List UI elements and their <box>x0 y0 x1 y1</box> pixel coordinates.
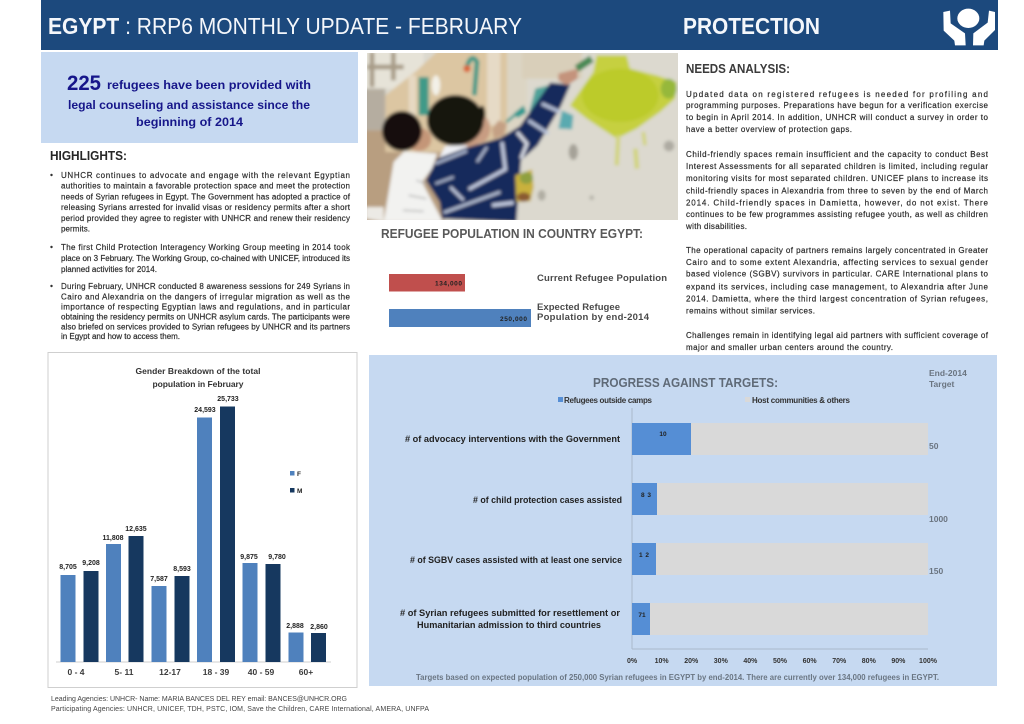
paragraph: verification exercise <box>686 90 989 134</box>
highlights panel <box>50 148 351 341</box>
bar: current refugee population <box>389 274 465 292</box>
row: advocacy interventions <box>405 423 939 455</box>
highlight bullet 3 <box>50 282 351 341</box>
axis labels: 80% <box>862 658 877 665</box>
row: sgbv cases <box>410 543 943 576</box>
highlight bullet 1: UNHCR continues to advocate and engage with the relevant Egyptian <box>61 171 350 180</box>
label: end-2014 target: End-2014 <box>929 368 967 378</box>
bars: age 0-4: 9,208 <box>82 560 100 567</box>
axis labels: 20% <box>684 658 699 665</box>
paragraph: operational capacity: remains without similar services. <box>686 306 815 316</box>
bar: expected refugee population <box>389 309 531 327</box>
row: sgbv cases: # of SGBV cases assisted with at least one service <box>410 555 622 565</box>
axis labels: 70% <box>832 658 847 665</box>
highlight bullet 3: During February, UNHCR conducted 8 awareness sessions for 249 Syrians in <box>61 282 350 291</box>
legend: gender: F <box>297 471 301 478</box>
paragraph: child-friendly spaces: with disabilities. <box>685 222 747 231</box>
highlight bullet 1: releasing Syrians arrested for invalid visas or residency permits after a short <box>61 203 351 212</box>
paragraph: child-friendly spaces: child-friendly spaces in Alexandria from three to seven by the end of March <box>686 186 988 196</box>
highlight bullet 1: period provided they agree to register with UNHCR and renew their residency <box>61 214 350 223</box>
callout: refugees provided with legal counseling: 225 <box>67 72 101 95</box>
row: advocacy interventions: # of advocacy interventions with the Government <box>405 434 620 444</box>
bars: age 60+: 2,888 <box>286 623 304 630</box>
label: current refugee population: Current Refugee Population <box>537 273 667 284</box>
row: sgbv cases: 12 <box>639 552 649 559</box>
row: advocacy interventions: 50 <box>929 441 939 451</box>
paragraph: operational capacity: 2014. Damietta, where the third largest concentration of Syrian refugees, <box>686 294 988 304</box>
heading: progress against targets: PROGRESS AGAINST TARGETS: <box>593 375 778 390</box>
paragraph: child-friendly spaces: Child-friendly spaces remain insufficient and the capacity to conduct Best <box>686 150 989 159</box>
bar: current refugee population: 134,000 <box>435 280 462 288</box>
paragraph: child-friendly spaces: continues to be few programmes assisting refugee youth, as well as children <box>686 210 988 219</box>
bars: age 40-59: 9,875 <box>240 554 258 561</box>
bars: age 12-17 <box>150 566 191 677</box>
highlight bullet 2 <box>50 243 351 274</box>
bars: age 18-39: 18 - 39 <box>203 667 230 677</box>
highlight bullet 2: place on 3 February. The Working Group, co-chained with UNICEF, introduced its <box>61 254 350 263</box>
title: EGYPT : RRP6 MONTHLY UPDATE - FEBRUARY <box>48 13 522 39</box>
highlight bullet 2: planned activities for 2014. <box>61 265 157 274</box>
paragraph: verification exercise: to begin in April 2014. In addition, UNHCR will conduct a survey in order to <box>686 113 989 122</box>
axis labels: 30% <box>714 658 729 665</box>
footer: agencies <box>51 696 429 713</box>
chart panel: gender breakdown <box>48 352 357 688</box>
heading: highlights: HIGHLIGHTS: <box>50 148 127 163</box>
row: resettlement submissions: Humanitarian admission to third countries <box>417 620 601 630</box>
axis labels: 90% <box>891 658 906 665</box>
row: advocacy interventions: 10 <box>659 431 667 438</box>
paragraph: child-friendly spaces: 2014. Child-friendly spaces in Damietta, however, do not exist. There <box>686 198 989 208</box>
label: end-2014 target: Target <box>929 379 955 389</box>
footer: agencies: Participating Agencies: UNHCR, UNICEF, TDH, PSTC, IOM, Save the Children, CARE International, AMERA, UNFPA <box>51 706 429 713</box>
highlight bullet 3: obtaining the residency permits on UNHCR asylum cards. The participants were <box>61 312 351 322</box>
chart title: population in February <box>152 379 244 389</box>
highlight bullet 3: importance of respecting Egyptian laws and regulations, and in particular <box>61 302 350 312</box>
bars: age 5-11: 5- 11 <box>115 667 134 677</box>
bars: age 60+: 60+ <box>299 667 313 677</box>
bars: age 5-11 <box>102 526 147 677</box>
footer: agencies: Leading Agencies: UNHCR- Name: MARIA BANCES DEL REY email: BANCES@UNHCR.ORG <box>51 696 347 703</box>
legend: progress: Host communities & others <box>752 396 851 405</box>
highlight bullet 1: authorities to maintain a favorable protection space and meet the protection <box>61 182 350 190</box>
row: resettlement submissions: 71 <box>638 612 646 619</box>
highlight bullet 3: also briefed on services provided to Syrian refugees by UNHCR and its partners <box>61 322 350 332</box>
label: expected refugee population: Expected Refugee <box>537 302 620 313</box>
bars: age 40-59: 9,780 <box>268 554 286 561</box>
bars: age 18-39: 25,733 <box>217 396 239 403</box>
row: resettlement submissions <box>400 603 928 635</box>
paragraph: operational capacity: based violence (SGBV) survivors in particular. CARE International plans to <box>686 270 989 278</box>
bars: age 60+ <box>286 623 328 677</box>
paragraph: operational capacity: expand its services, including case management, to Alexandria after June <box>686 282 989 292</box>
bar: expected refugee population: 250,000 <box>500 316 527 323</box>
row: child protection cases: # of child protection cases assisted <box>473 495 622 505</box>
label: expected refugee population <box>537 302 650 323</box>
axis labels: 0% <box>627 658 638 665</box>
highlight bullet 3: Cairo and Alexandria on the dangers of irregular migration as well as the <box>61 292 351 302</box>
heading: refugee population in country: REFUGEE POPULATION IN COUNTRY EGYPT: <box>381 227 643 241</box>
row: resettlement submissions: # of Syrian refugees submitted for resettlement or <box>400 608 621 618</box>
axis labels: 50% <box>773 658 788 665</box>
legend: progress <box>558 396 851 405</box>
callout: refugees provided with legal counseling: refugees have been provided with <box>107 78 311 92</box>
chart title <box>136 366 260 389</box>
bars: age 18-39: 24,593 <box>194 407 216 414</box>
header banner <box>41 0 998 50</box>
axis labels: 100% <box>919 658 938 665</box>
row: child protection cases <box>473 483 948 524</box>
row: child protection cases: 83 <box>641 492 651 499</box>
axis labels <box>627 658 938 665</box>
bars: age 12-17: 7,587 <box>150 576 168 583</box>
bars: age 12-17: 8,593 <box>173 566 191 573</box>
paragraph: challenges <box>686 331 989 352</box>
paragraph: child-friendly spaces <box>685 150 989 231</box>
paragraph: verification exercise: programming purposes. Preparations have begun for a verification exercise <box>686 101 989 110</box>
label: end-2014 target <box>929 368 967 389</box>
bars: age 0-4: 0 - 4 <box>67 667 85 677</box>
paragraph: challenges: major and smaller urban centers around the country. <box>686 343 893 352</box>
legend: gender: M <box>297 488 302 495</box>
callout: refugees provided with legal counseling <box>41 52 358 143</box>
bars: age 5-11: 11,808 <box>102 535 124 542</box>
bars: age 60+: 2,860 <box>310 624 328 631</box>
bars: age 0-4 <box>59 560 100 677</box>
photo: children painting a wall <box>367 53 678 220</box>
axis labels: 10% <box>655 658 669 665</box>
highlight bullet 3: in Egypt and how to access them. <box>61 332 180 341</box>
row: sgbv cases: 150 <box>929 566 943 576</box>
chart title: Gender Breakdown of the total <box>136 366 260 376</box>
bar chart: refugee population <box>389 273 667 327</box>
callout: refugees provided with legal counseling: legal counseling and assistance since the <box>68 98 310 112</box>
footnote: targets: Targets based on expected population of 250,000 Syrian refugees in EGYPT by end-2014. There are currently over 134,000 refugees in EGYPT. <box>416 673 939 682</box>
paragraph: operational capacity: The operational capacity of partners remains largely concentrated in Greater <box>686 246 988 255</box>
axis labels: 40% <box>743 658 758 665</box>
paragraph: verification exercise: Updated data on registered refugees is needed for profiling and <box>686 90 988 99</box>
highlight bullet 1: permits. <box>61 224 90 234</box>
highlight bullet 1 <box>50 171 351 234</box>
bars: age 40-59 <box>240 554 286 677</box>
legend: gender <box>290 471 302 495</box>
axis labels: 60% <box>803 658 817 665</box>
icon: protecting hands <box>943 9 995 45</box>
callout: refugees provided with legal counseling: beginning of 2014 <box>136 115 243 129</box>
paragraph: challenges: Challenges remain in identifying legal aid partners with sufficient coverage of <box>686 331 989 340</box>
row: child protection cases: 1000 <box>929 514 948 524</box>
needs analysis panel <box>685 62 989 352</box>
paragraph: operational capacity: Cairo and to some extent Alexandria, affecting services to sexual gender <box>686 258 988 267</box>
legend: progress: Refugees outside camps <box>564 396 653 405</box>
panel: progress against targets <box>369 355 997 686</box>
bars: age 12-17: 12-17 <box>159 667 181 677</box>
bars: age 18-39 <box>194 396 239 677</box>
highlight bullet 1: needs of Syrian refugees in Egypt. The Government has adopted a practice of <box>61 192 351 202</box>
paragraph: child-friendly spaces: Interest Assessments for all separated children is limited, including regular <box>686 162 988 171</box>
bars: age 5-11: 12,635 <box>125 526 147 533</box>
paragraph: child-friendly spaces: monitoring visits for most separated children. UNICEF plans to increase its <box>686 174 988 183</box>
highlight bullet 2: The first Child Protection Interagency Working Group meeting in 2014 took <box>61 243 351 252</box>
section title: protection: PROTECTION <box>683 13 820 39</box>
paragraph: verification exercise: have a better overview of protection gaps. <box>686 125 852 134</box>
bars: age 40-59: 40 - 59 <box>248 667 275 677</box>
label: expected refugee population: Population by end-2014 <box>537 312 650 323</box>
bars: age 0-4: 8,705 <box>59 564 77 571</box>
paragraph: operational capacity <box>686 246 989 316</box>
heading: needs analysis: NEEDS ANALYSIS: <box>686 62 790 76</box>
